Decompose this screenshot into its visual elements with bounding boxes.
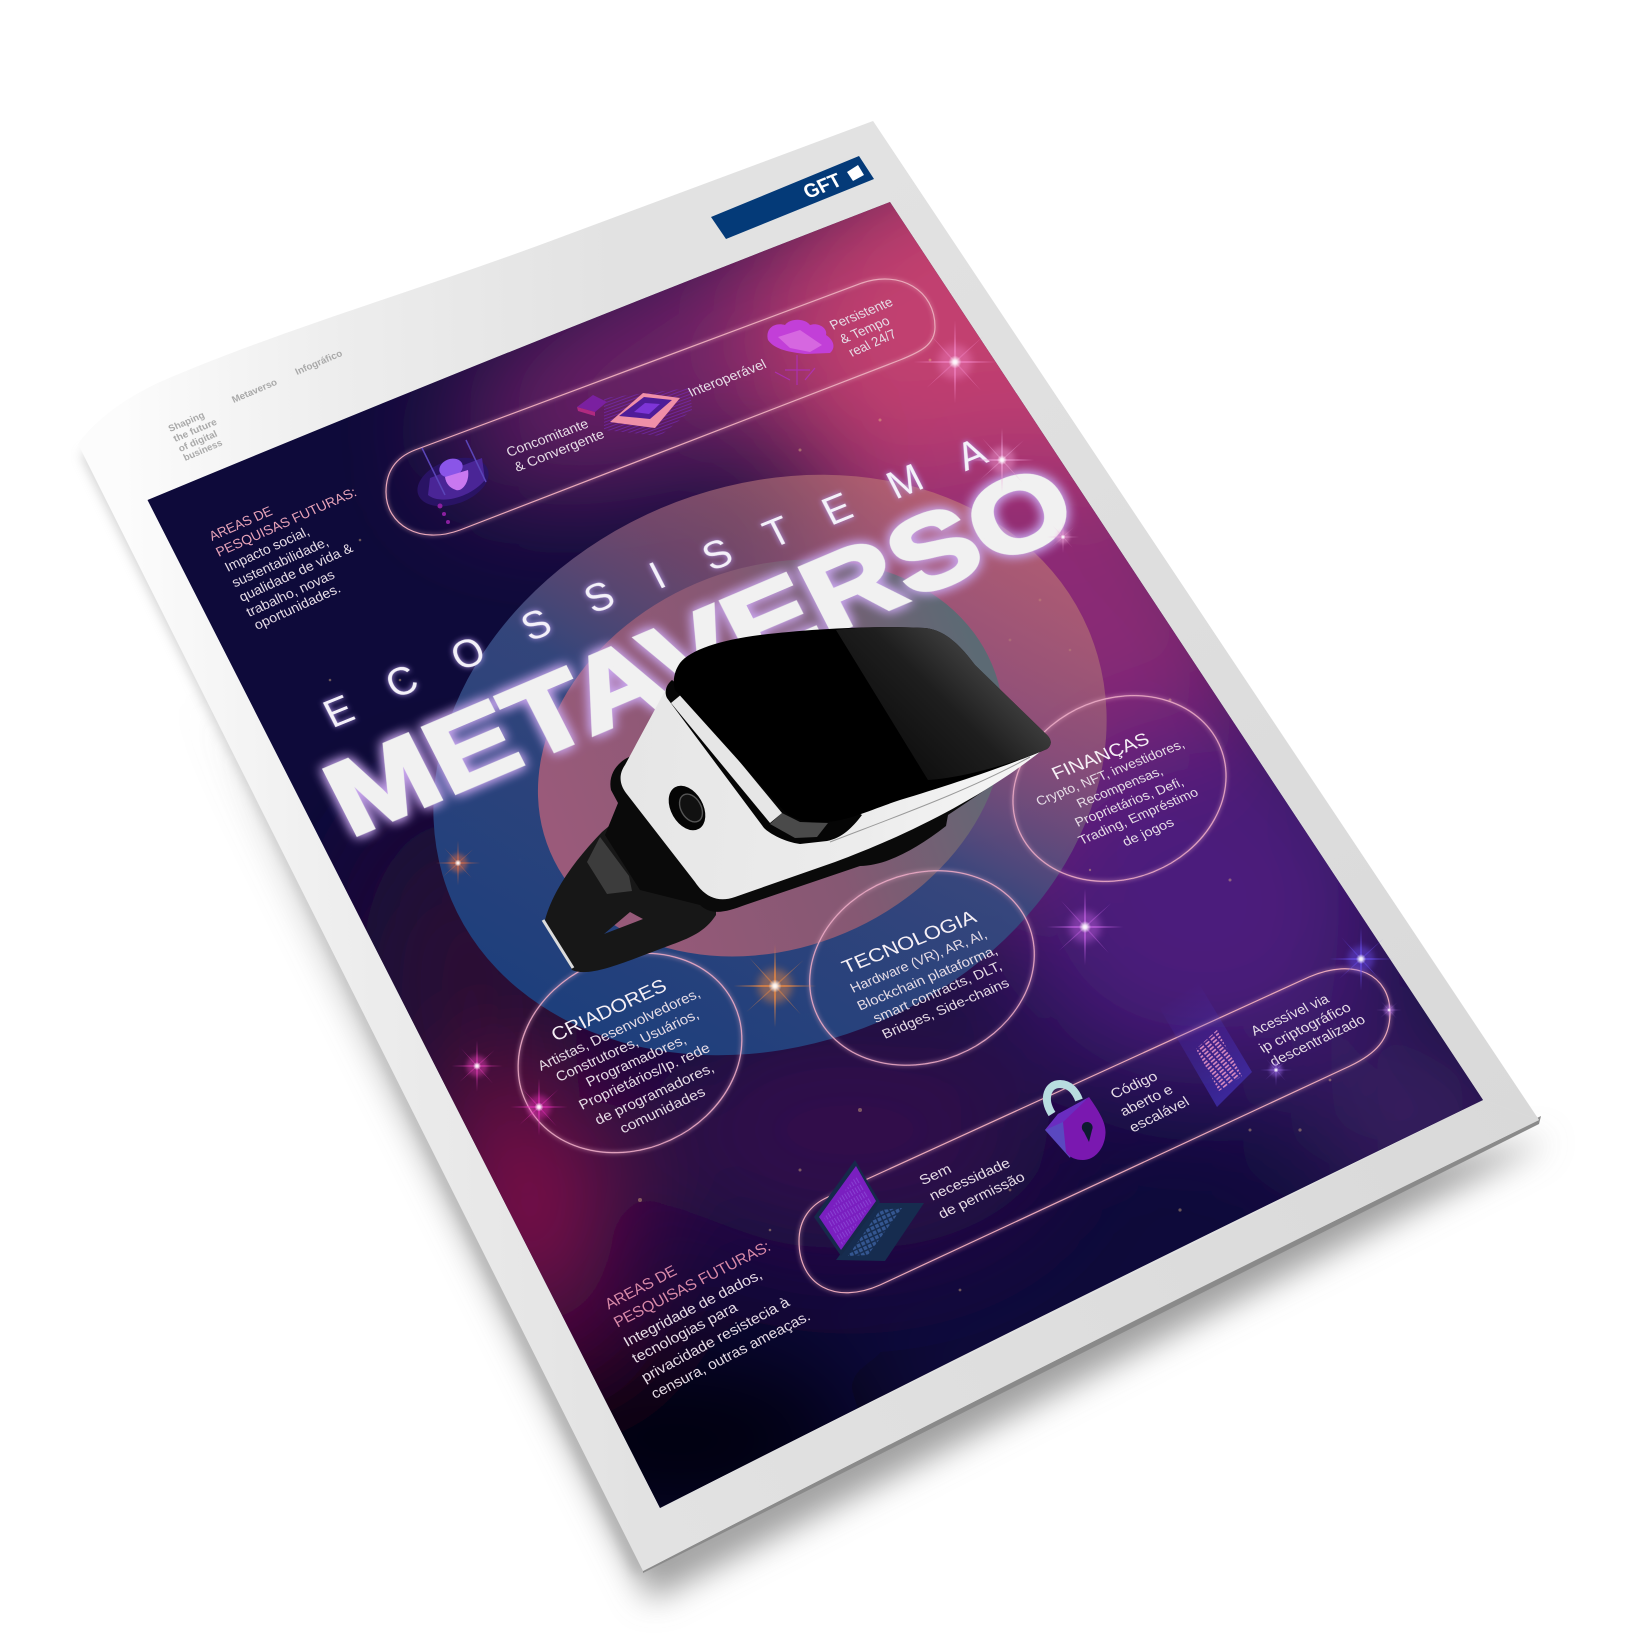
text block: future research top: AREAS DE bbox=[207, 503, 275, 544]
text: persistente: Persistente bbox=[827, 295, 896, 333]
header text: shaping the future: of digital bbox=[177, 429, 219, 455]
icon: code document bbox=[1160, 982, 1252, 1107]
title: ecossistema: ECOSSISTEMA bbox=[313, 423, 994, 736]
text: interoperavel: Interoperável bbox=[685, 357, 769, 400]
brochure shadow bbox=[200, 700, 1550, 1600]
header text: shaping the future: Shaping bbox=[167, 410, 207, 435]
financas body: Proprietários, Defi, bbox=[1072, 774, 1186, 830]
background base bbox=[148, 202, 1483, 1508]
paper sheet bbox=[78, 121, 1539, 1571]
cloud server lines bbox=[778, 330, 822, 352]
lock top bbox=[1045, 1097, 1089, 1130]
top pill outline bbox=[386, 279, 935, 535]
icon: cloud bbox=[767, 320, 833, 385]
logo square bbox=[847, 165, 864, 181]
laptop screen bbox=[819, 1166, 876, 1250]
laptop base bbox=[836, 1203, 924, 1261]
icon: chip bbox=[577, 388, 692, 436]
text: persistente bbox=[827, 295, 899, 360]
background colour clouds bbox=[332, 202, 1483, 1508]
white body bbox=[621, 660, 1050, 899]
lock side bbox=[1045, 1099, 1088, 1158]
text block: future research bottom: censura, outras ameaças. bbox=[649, 1309, 813, 1402]
stars bbox=[436, 320, 1402, 1136]
laptop lid bbox=[814, 1160, 880, 1256]
text block: future research bottom: privacidade resistecia à bbox=[639, 1294, 794, 1386]
text: concomitante bbox=[504, 416, 607, 475]
text: sem necessidade: necessidade bbox=[926, 1155, 1013, 1203]
text: codigo aberto: Código bbox=[1107, 1068, 1161, 1102]
page stack edge bbox=[643, 1116, 1541, 1573]
text: sem necessidade: de permissão bbox=[935, 1168, 1028, 1222]
criadores body: Construtores, Usuários, bbox=[553, 1006, 701, 1085]
text: acessivel bbox=[1248, 991, 1368, 1069]
text block: future research top: sustentabilidade, bbox=[229, 534, 331, 590]
laptop keyboard bbox=[848, 1208, 902, 1256]
dust particles bbox=[329, 359, 1331, 1291]
text block: future research bottom: PESQUISAS FUTURAS: bbox=[611, 1238, 774, 1331]
criadores body: Artistas, Desenvolvedores, bbox=[535, 985, 703, 1074]
financas ring bbox=[985, 664, 1254, 913]
circle: tecnologia bbox=[780, 838, 1064, 1098]
icon: padlock bbox=[1045, 1084, 1106, 1160]
text: acessivel: ip criptográfico bbox=[1256, 999, 1354, 1056]
robot head bbox=[437, 455, 465, 481]
text: sem necessidade: Sem bbox=[916, 1160, 954, 1188]
artwork panel bbox=[148, 202, 1483, 1508]
camera ring bbox=[675, 790, 707, 826]
criadores body: comunidades bbox=[617, 1083, 708, 1136]
text: sem necessidade bbox=[916, 1155, 1028, 1222]
laptop screen code bbox=[824, 1176, 872, 1245]
black bevel bbox=[666, 680, 862, 844]
white strip bbox=[671, 693, 782, 823]
header text: shaping the future: the future bbox=[172, 417, 219, 445]
tecnologia body: Bridges, Side-chains bbox=[879, 975, 1012, 1042]
blue bar bbox=[711, 156, 874, 239]
criadores body: Proprietários/Ip. rede bbox=[576, 1039, 713, 1113]
shackle bbox=[1047, 1084, 1079, 1114]
robot platform bbox=[428, 458, 485, 500]
robot disc bbox=[411, 449, 495, 515]
tecnologia body: smart contracts, DLT, bbox=[870, 958, 1004, 1026]
tecnologia body: Blockchain plataforma, bbox=[854, 943, 1000, 1013]
chip core bbox=[619, 397, 672, 419]
header text: shaping the future bbox=[167, 410, 224, 464]
criadores heading: CRIADORES bbox=[548, 976, 671, 1046]
text: persistente: & Tempo bbox=[837, 313, 892, 347]
left edge shadow bbox=[86, 452, 640, 1572]
text block: future research bottom: tecnologias para bbox=[629, 1299, 741, 1367]
text: persistente: real 24/7 bbox=[846, 326, 899, 360]
text block: future research top bbox=[207, 484, 359, 633]
text: acessivel: descentralizado bbox=[1266, 1011, 1368, 1069]
visor bbox=[674, 627, 1051, 823]
bottom paper band bbox=[643, 1100, 1539, 1571]
circle: financas bbox=[985, 664, 1254, 913]
GFT logo bar bbox=[711, 156, 874, 239]
bottom pill outline bbox=[799, 969, 1390, 1293]
criadores body bbox=[535, 985, 717, 1136]
outer blue circle bbox=[433, 474, 1107, 1056]
light beam bbox=[1160, 982, 1252, 1107]
text: concomitante: & Convergente bbox=[512, 426, 607, 475]
chip base bbox=[610, 393, 680, 428]
text: codigo aberto bbox=[1107, 1068, 1192, 1135]
text: acessivel: Acessível via bbox=[1248, 991, 1332, 1039]
text block: future research top: trabalho, novas bbox=[244, 567, 337, 620]
criadores body: de programadores, bbox=[592, 1059, 717, 1128]
cloud circuit bbox=[775, 355, 815, 385]
financas body bbox=[1033, 736, 1201, 849]
financas body: Recompensas, bbox=[1074, 763, 1165, 811]
gasket bbox=[605, 700, 1000, 912]
cloud body bbox=[767, 320, 833, 354]
header text: infografico: Infográfico bbox=[293, 348, 345, 378]
cube side bbox=[577, 407, 595, 416]
tecnologia heading: TECNOLOGIA bbox=[839, 907, 980, 978]
code block bbox=[1196, 1030, 1242, 1091]
tecnologia body: Hardware (VR), AR, AI, bbox=[847, 927, 989, 996]
small cube bbox=[577, 395, 607, 412]
text block: future research top: PESQUISAS FUTURAS: bbox=[213, 484, 359, 560]
lock front bbox=[1063, 1097, 1106, 1160]
robot body bbox=[445, 470, 468, 490]
VR headset bbox=[543, 627, 1051, 972]
financas body: Trading, Empréstimo bbox=[1075, 785, 1201, 848]
text block: future research bottom: AREAS DE bbox=[602, 1263, 680, 1313]
keyhole bbox=[1082, 1122, 1093, 1142]
financas body: Crypto, NFT, investidores, bbox=[1033, 736, 1187, 809]
icon: robot bbox=[411, 440, 495, 524]
circle: criadores bbox=[485, 917, 775, 1189]
text: concomitante: Concomitante bbox=[504, 416, 591, 460]
tecnologia ring bbox=[780, 838, 1064, 1098]
text: codigo aberto: escalável bbox=[1126, 1093, 1192, 1135]
strap clip bbox=[543, 920, 573, 968]
criadores body: Programadores, bbox=[583, 1031, 689, 1090]
text block: future research top: Impacto social, bbox=[222, 524, 312, 575]
text block: future research bottom bbox=[602, 1238, 813, 1402]
strap highlight bbox=[587, 837, 632, 894]
glossy corner bbox=[770, 813, 828, 838]
body seam bbox=[830, 757, 1030, 842]
text block: future research top: qualidade de vida & bbox=[236, 540, 355, 605]
visor gloss bbox=[836, 627, 1051, 780]
financas body: de jogos bbox=[1119, 814, 1177, 849]
text block: future research top: oportunidades. bbox=[251, 581, 343, 633]
GFT wordmark: GFT bbox=[800, 170, 846, 203]
header text: metaverso: Metaverso bbox=[230, 377, 279, 406]
robot trail dots bbox=[438, 504, 450, 524]
financas heading: FINANÇAS bbox=[1048, 729, 1153, 784]
chip traces bbox=[604, 388, 692, 436]
chip center bbox=[634, 403, 660, 414]
camera lens bbox=[661, 779, 713, 837]
header text: shaping the future: business bbox=[182, 438, 224, 464]
text block: future research bottom: Integridade de dados, bbox=[621, 1267, 765, 1350]
robot light beams bbox=[422, 440, 486, 495]
text: codigo aberto: aberto e bbox=[1117, 1081, 1176, 1119]
title: metaverso: METAVERSO bbox=[307, 443, 1092, 859]
criadores ring bbox=[485, 917, 775, 1189]
strap bbox=[545, 800, 716, 972]
icon: laptop bbox=[814, 1160, 924, 1261]
tecnologia body bbox=[847, 927, 1012, 1042]
inner pink circle bbox=[538, 560, 1000, 956]
paper right band bbox=[873, 121, 1539, 1120]
